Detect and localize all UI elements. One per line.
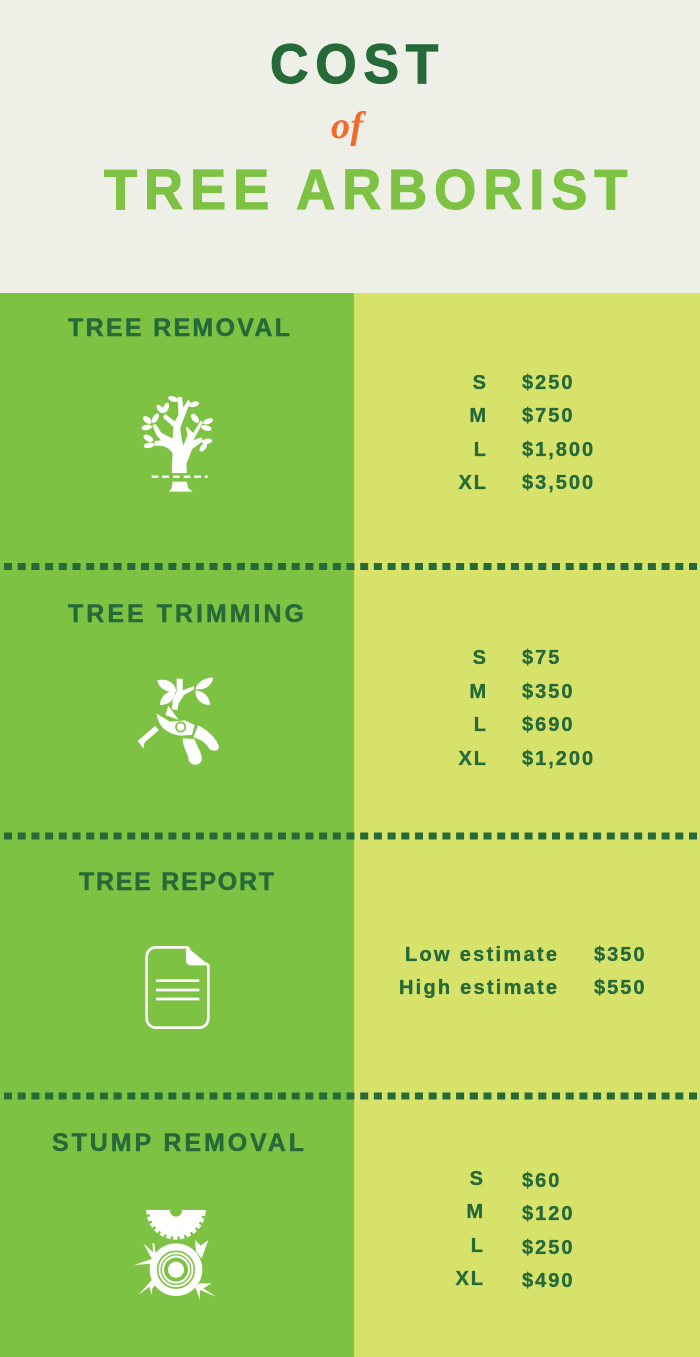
price table: tree trimming: $690 xyxy=(522,714,574,736)
price table: stump removal: $120 xyxy=(522,1203,574,1225)
panel: stump removal xyxy=(52,1129,574,1300)
price table: tree trimming: $350 xyxy=(522,681,574,703)
price table: tree trimming xyxy=(458,647,595,770)
price table: tree trimming: L xyxy=(474,714,488,736)
price table: stump removal: XL xyxy=(455,1268,485,1290)
price table: tree removal: M xyxy=(469,405,488,427)
title: of xyxy=(331,105,366,147)
icon: tree with cut line xyxy=(141,395,214,492)
title xyxy=(104,33,634,221)
price table: tree removal: XL xyxy=(458,472,488,494)
price table: tree trimming: S xyxy=(473,647,488,669)
price table: tree removal xyxy=(458,372,595,494)
title: COST xyxy=(270,33,445,95)
icon: document xyxy=(147,945,211,1028)
price table: tree trimming: $75 xyxy=(522,647,561,669)
panel: right lime column xyxy=(354,293,700,1357)
title: TREE ARBORIST xyxy=(104,158,634,221)
price table: stump removal: L xyxy=(471,1235,485,1257)
price table: tree removal: S xyxy=(473,372,488,394)
price table: tree removal: L xyxy=(474,439,488,461)
panel: tree trimming xyxy=(68,600,595,770)
price table: stump removal: $250 xyxy=(522,1237,574,1259)
price table: stump removal: S xyxy=(470,1168,485,1190)
price table: tree report xyxy=(399,944,646,999)
icon: saw blade over stump xyxy=(134,1202,216,1300)
price table: stump removal: $490 xyxy=(522,1270,574,1292)
heading: tree report: TREE REPORT xyxy=(79,868,274,896)
panel: tree removal xyxy=(68,314,595,494)
panel: tree report xyxy=(79,868,646,1028)
heading: tree removal: TREE REMOVAL xyxy=(68,314,290,342)
price table: tree report: $350 xyxy=(594,944,646,966)
price table: stump removal xyxy=(455,1168,574,1292)
price table: stump removal: $60 xyxy=(522,1170,561,1192)
icon: pruning shears with branch xyxy=(138,678,219,765)
price table: tree trimming: XL xyxy=(458,748,488,770)
price table: tree report: Low estimate xyxy=(405,944,559,966)
price table: tree report: $550 xyxy=(594,977,646,999)
price table: tree removal: $3,500 xyxy=(522,472,595,494)
price table: tree report: High estimate xyxy=(399,977,559,999)
price table: tree removal: $1,800 xyxy=(522,439,595,461)
heading: stump removal: STUMP REMOVAL xyxy=(52,1129,304,1157)
price table: tree removal: $750 xyxy=(522,405,574,427)
heading: tree trimming: TREE TRIMMING xyxy=(68,600,304,628)
panel: left green column xyxy=(0,293,354,1357)
price table: tree trimming: $1,200 xyxy=(522,748,595,770)
price table: stump removal: M xyxy=(466,1201,485,1223)
price table: tree removal: $250 xyxy=(522,372,574,394)
price table: tree trimming: M xyxy=(469,681,488,703)
